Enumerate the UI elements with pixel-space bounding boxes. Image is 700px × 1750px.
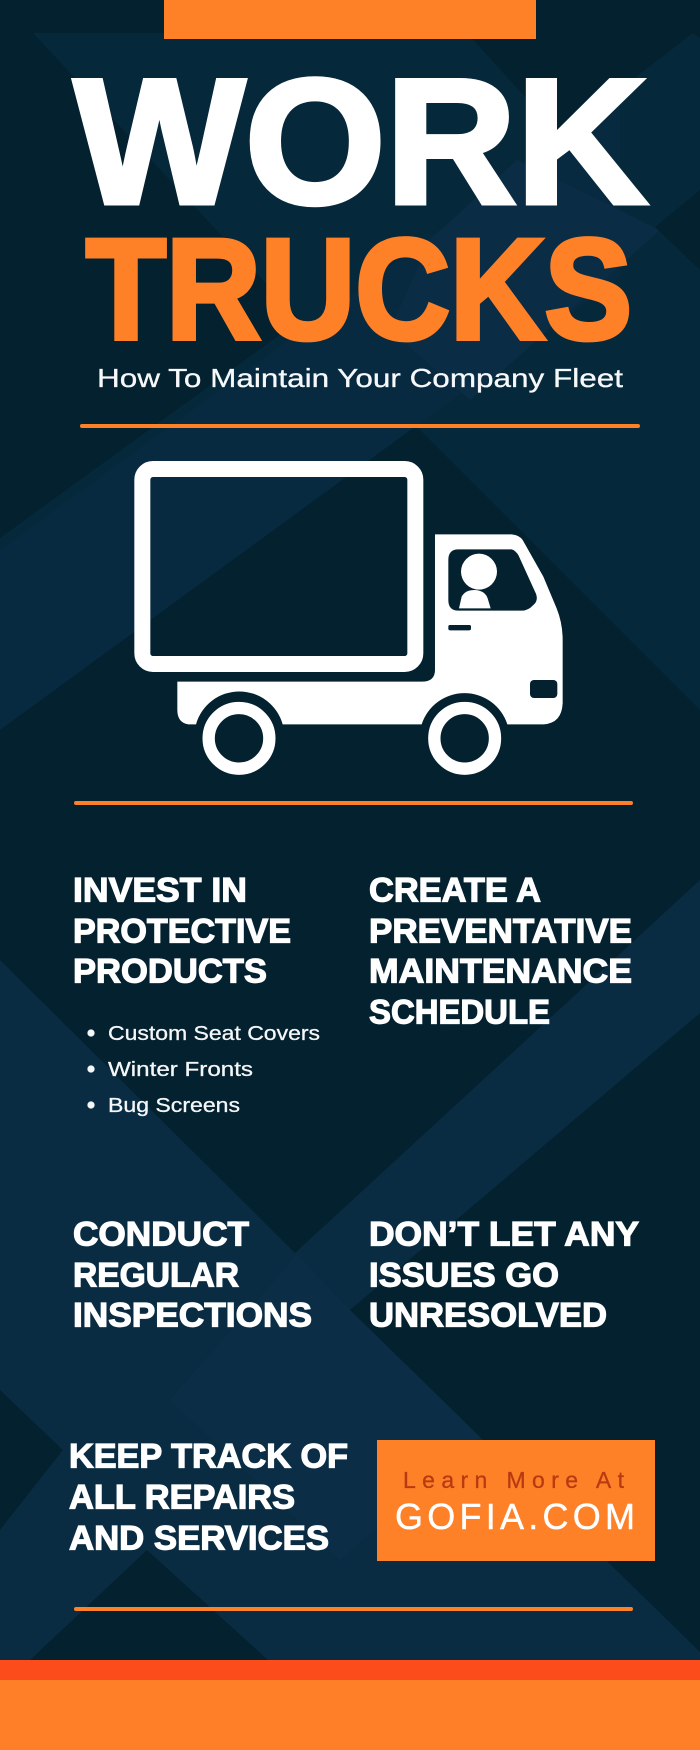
list: protective products: Custom Seat Covers xyxy=(108,1022,320,1045)
heading: keep track of all repairs and services: AND SERVICES xyxy=(69,1520,329,1558)
heading: conduct regular inspections: INSPECTIONS xyxy=(73,1296,312,1334)
title: WORK TRUCKS xyxy=(74,42,647,370)
front wheel xyxy=(434,708,495,769)
title line: TRUCKS: TRUCKS xyxy=(86,210,632,370)
truck cab and chassis xyxy=(177,534,563,724)
call to action box xyxy=(377,1440,655,1561)
heading: invest in protective products: INVEST IN xyxy=(73,872,247,910)
heading: conduct regular inspections: REGULAR xyxy=(73,1256,239,1294)
heading: invest in protective products xyxy=(73,872,291,990)
door handle xyxy=(448,625,471,630)
footer band: red stripe xyxy=(0,1660,700,1680)
heading: keep track of all repairs and services: ALL REPAIRS xyxy=(69,1478,295,1516)
heading: create a preventative maintenance schedule: CREATE A xyxy=(369,872,541,910)
heading: create a preventative maintenance schedule: MAINTENANCE xyxy=(369,952,632,990)
heading: don't let any issues go unresolved xyxy=(369,1216,639,1334)
heading: conduct regular inspections xyxy=(73,1216,312,1334)
list: protective products xyxy=(88,1022,320,1117)
truck window xyxy=(448,549,537,611)
heading: create a preventative maintenance schedule: SCHEDULE xyxy=(369,994,550,1032)
heading: don't let any issues go unresolved: DON’T LET ANY xyxy=(369,1216,639,1254)
cta text: learn more at: Learn More At xyxy=(403,1467,625,1493)
truck cargo box xyxy=(142,469,415,664)
heading: conduct regular inspections: CONDUCT xyxy=(73,1216,249,1254)
title line: WORK: WORK xyxy=(74,42,647,241)
driver xyxy=(459,554,497,608)
heading: create a preventative maintenance schedule xyxy=(369,872,632,1032)
heading: create a preventative maintenance schedule: PREVENTATIVE xyxy=(369,912,632,950)
cta text: gofia.com: GOFIA.COM xyxy=(395,1496,635,1537)
list: protective products: Bug Screens xyxy=(108,1094,240,1117)
top orange tab xyxy=(164,0,536,39)
subtitle: How To Maintain Your Company Fleet xyxy=(97,363,624,393)
list: protective products: Winter Fronts xyxy=(108,1058,253,1081)
rear wheel xyxy=(209,708,269,769)
heading: don't let any issues go unresolved: ISSUES GO xyxy=(369,1256,559,1294)
divider: under subtitle xyxy=(80,424,640,428)
heading: invest in protective products: PRODUCTS xyxy=(73,952,267,990)
heading: keep track of all repairs and services xyxy=(69,1438,348,1558)
divider: under truck xyxy=(74,801,633,805)
divider: bottom xyxy=(74,1607,633,1611)
heading: don't let any issues go unresolved: UNRESOLVED xyxy=(369,1296,607,1334)
icon: delivery truck with driver xyxy=(142,469,563,769)
headlight xyxy=(530,680,557,698)
heading: keep track of all repairs and services: KEEP TRACK OF xyxy=(69,1438,348,1476)
heading: invest in protective products: PROTECTIVE xyxy=(73,912,291,950)
footer band: orange xyxy=(0,1680,700,1750)
